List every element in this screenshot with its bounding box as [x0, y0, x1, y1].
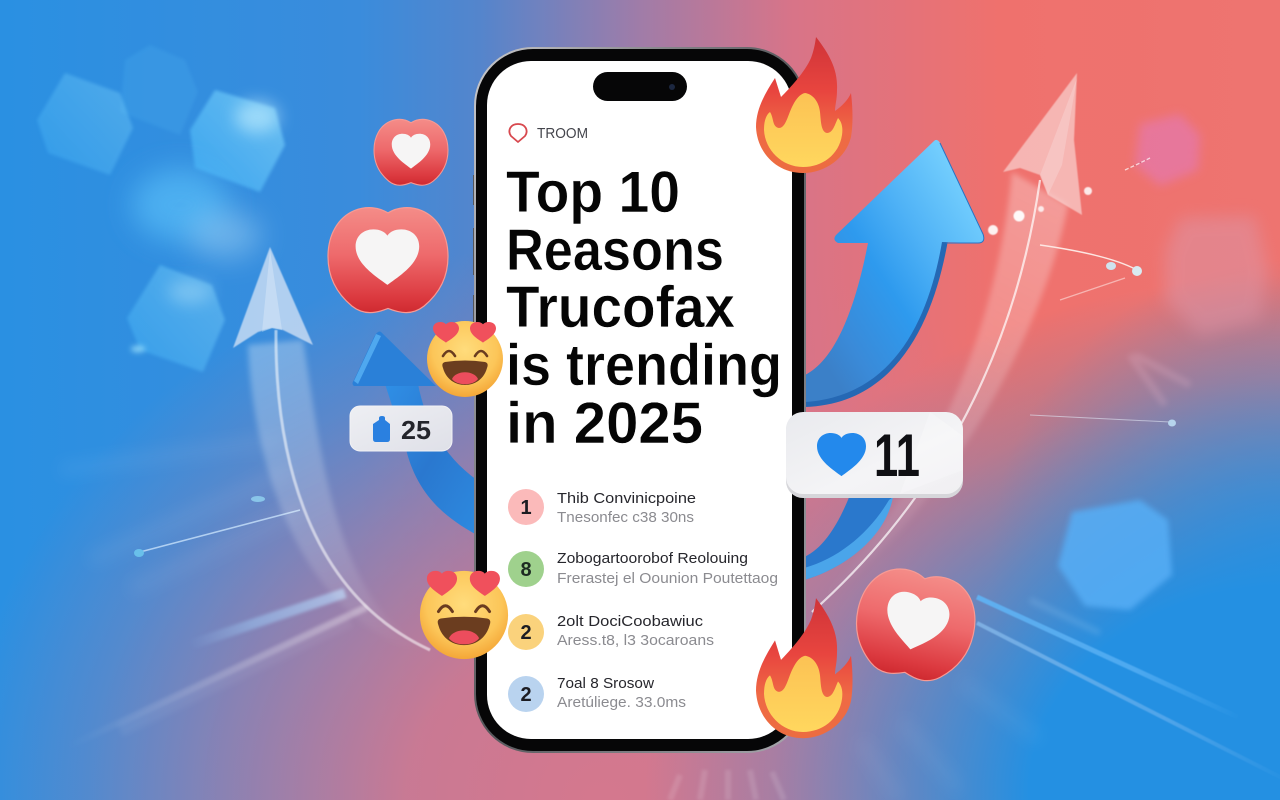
blue arrow right: [805, 140, 984, 407]
list item 3: [508, 613, 714, 650]
list item 1: Tnesonfec c38 30ns: [557, 509, 694, 526]
badge: like count 11: [786, 412, 963, 498]
list item 3: Aress.t8, l3 3ocaroans: [557, 632, 714, 649]
title: is trending: [506, 333, 782, 398]
icon: flame lower: [756, 598, 852, 738]
list item 3: 2: [520, 622, 532, 644]
phone side buttons: [474, 175, 805, 342]
icon: heart badge large: [328, 208, 448, 313]
icon: heart badge lower right: [846, 561, 984, 689]
icon: heart-eyes emoji upper: [427, 321, 503, 397]
list item 2: Zobogartoorobof Reolouing: [557, 550, 748, 567]
right background blobs: [1058, 114, 1268, 610]
icon: blue bottle: [373, 416, 390, 442]
badge: like count 25: 25: [401, 415, 431, 445]
white translucent arrow left: [233, 247, 430, 655]
white translucent arrow right: [810, 73, 1082, 612]
phone screen: [487, 61, 792, 739]
list item 4: 2: [520, 684, 532, 706]
list item 2: [508, 550, 778, 587]
title: Top 10: [506, 160, 680, 225]
icon: heart badge small: [374, 119, 448, 185]
sparkles and streaks right: [988, 158, 1190, 426]
title: [506, 160, 782, 456]
icon: heart-eyes emoji lower: [420, 571, 508, 659]
dynamic island: [593, 72, 687, 101]
list item 4: [508, 675, 686, 712]
blue arrow left: [352, 332, 477, 535]
brand mark: [509, 124, 588, 142]
phone body: [475, 48, 805, 752]
list item 4: Aretúliege. 33.0ms: [557, 694, 686, 711]
list item 1: 1: [520, 497, 532, 519]
left hexagon cluster: [37, 45, 285, 372]
list item 2: Frerastej el Oounion Poutettaog: [557, 570, 778, 587]
brand mark: TROOM: [537, 126, 588, 142]
icon: flame upper: [756, 37, 852, 173]
light rays lower left: [60, 440, 367, 747]
list item 3: 2olt DociCoobawiuc: [557, 613, 704, 630]
light rays lower right: [670, 597, 1280, 800]
phone: [474, 48, 805, 752]
list item 1: [508, 489, 696, 526]
icon: blue heart: [817, 433, 866, 476]
title: Trucofax: [506, 275, 735, 340]
badge: like count 25: [350, 406, 452, 451]
list item 1: Thib Convinicpoine: [557, 490, 696, 507]
badge: like count 11: 11: [874, 422, 920, 489]
title: Reasons: [506, 218, 724, 283]
list item 4: 7oal 8 Srosow: [557, 675, 654, 692]
blue arrow tail lower right: [804, 495, 893, 580]
list item 2: 8: [520, 559, 532, 581]
title: in 2025: [506, 391, 703, 456]
